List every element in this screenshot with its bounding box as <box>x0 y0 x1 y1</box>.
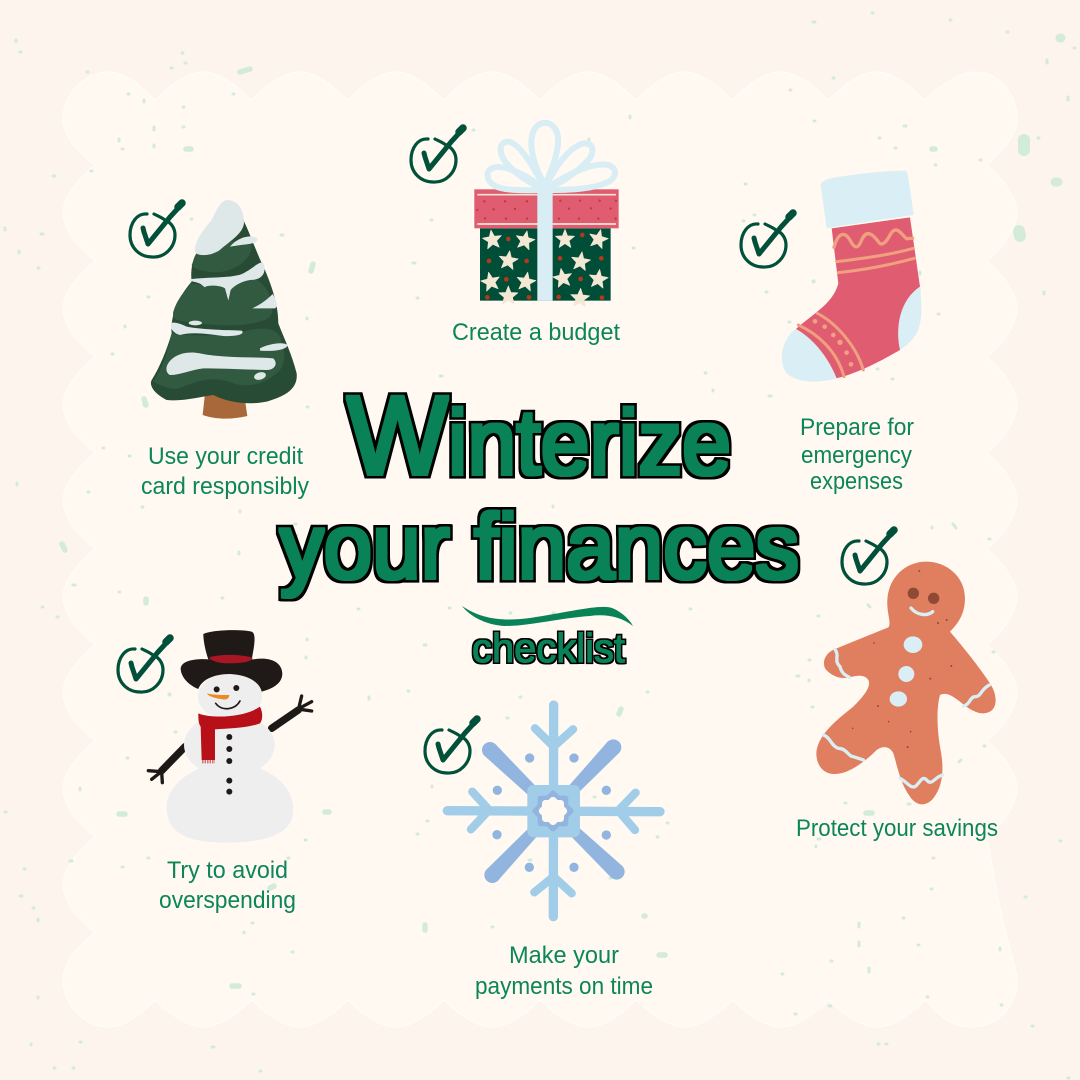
icon: snowy tree <box>151 200 297 419</box>
label: credit card: card responsibly <box>141 473 310 500</box>
label: savings: Protect your savings <box>796 815 998 842</box>
icon: snowman <box>148 630 312 843</box>
label: payments <box>475 942 653 1000</box>
icon: snowflake <box>447 705 660 917</box>
label: credit card <box>141 443 310 500</box>
scalloped panel <box>63 72 1017 1027</box>
check: budget <box>411 128 463 182</box>
check: overspending <box>118 638 170 692</box>
check: payments <box>425 719 477 773</box>
label: overspending: overspending <box>159 887 296 914</box>
check: savings <box>842 530 894 584</box>
label: payments: Make your <box>509 942 619 969</box>
label: budget: Create a budget <box>452 319 620 346</box>
label: payments: payments on time <box>475 973 653 1000</box>
label: emergency: Prepare for <box>800 414 914 441</box>
title: your finances <box>280 496 799 598</box>
label: overspending: Try to avoid <box>167 857 288 884</box>
subtitle: checklist <box>472 625 626 671</box>
label: credit card: Use your credit <box>148 443 303 470</box>
label: emergency: expenses <box>810 468 903 495</box>
icon: gingerbread man <box>816 562 996 804</box>
check: emergency <box>741 213 793 267</box>
icon: stocking <box>782 171 921 382</box>
swoosh <box>462 606 633 626</box>
title: Winterize <box>347 373 731 498</box>
label: overspending <box>159 857 296 914</box>
label: emergency: emergency <box>801 442 913 469</box>
label: emergency <box>800 414 914 495</box>
icon: gift box <box>474 123 619 307</box>
check: credit card <box>130 203 182 257</box>
title <box>280 373 799 598</box>
